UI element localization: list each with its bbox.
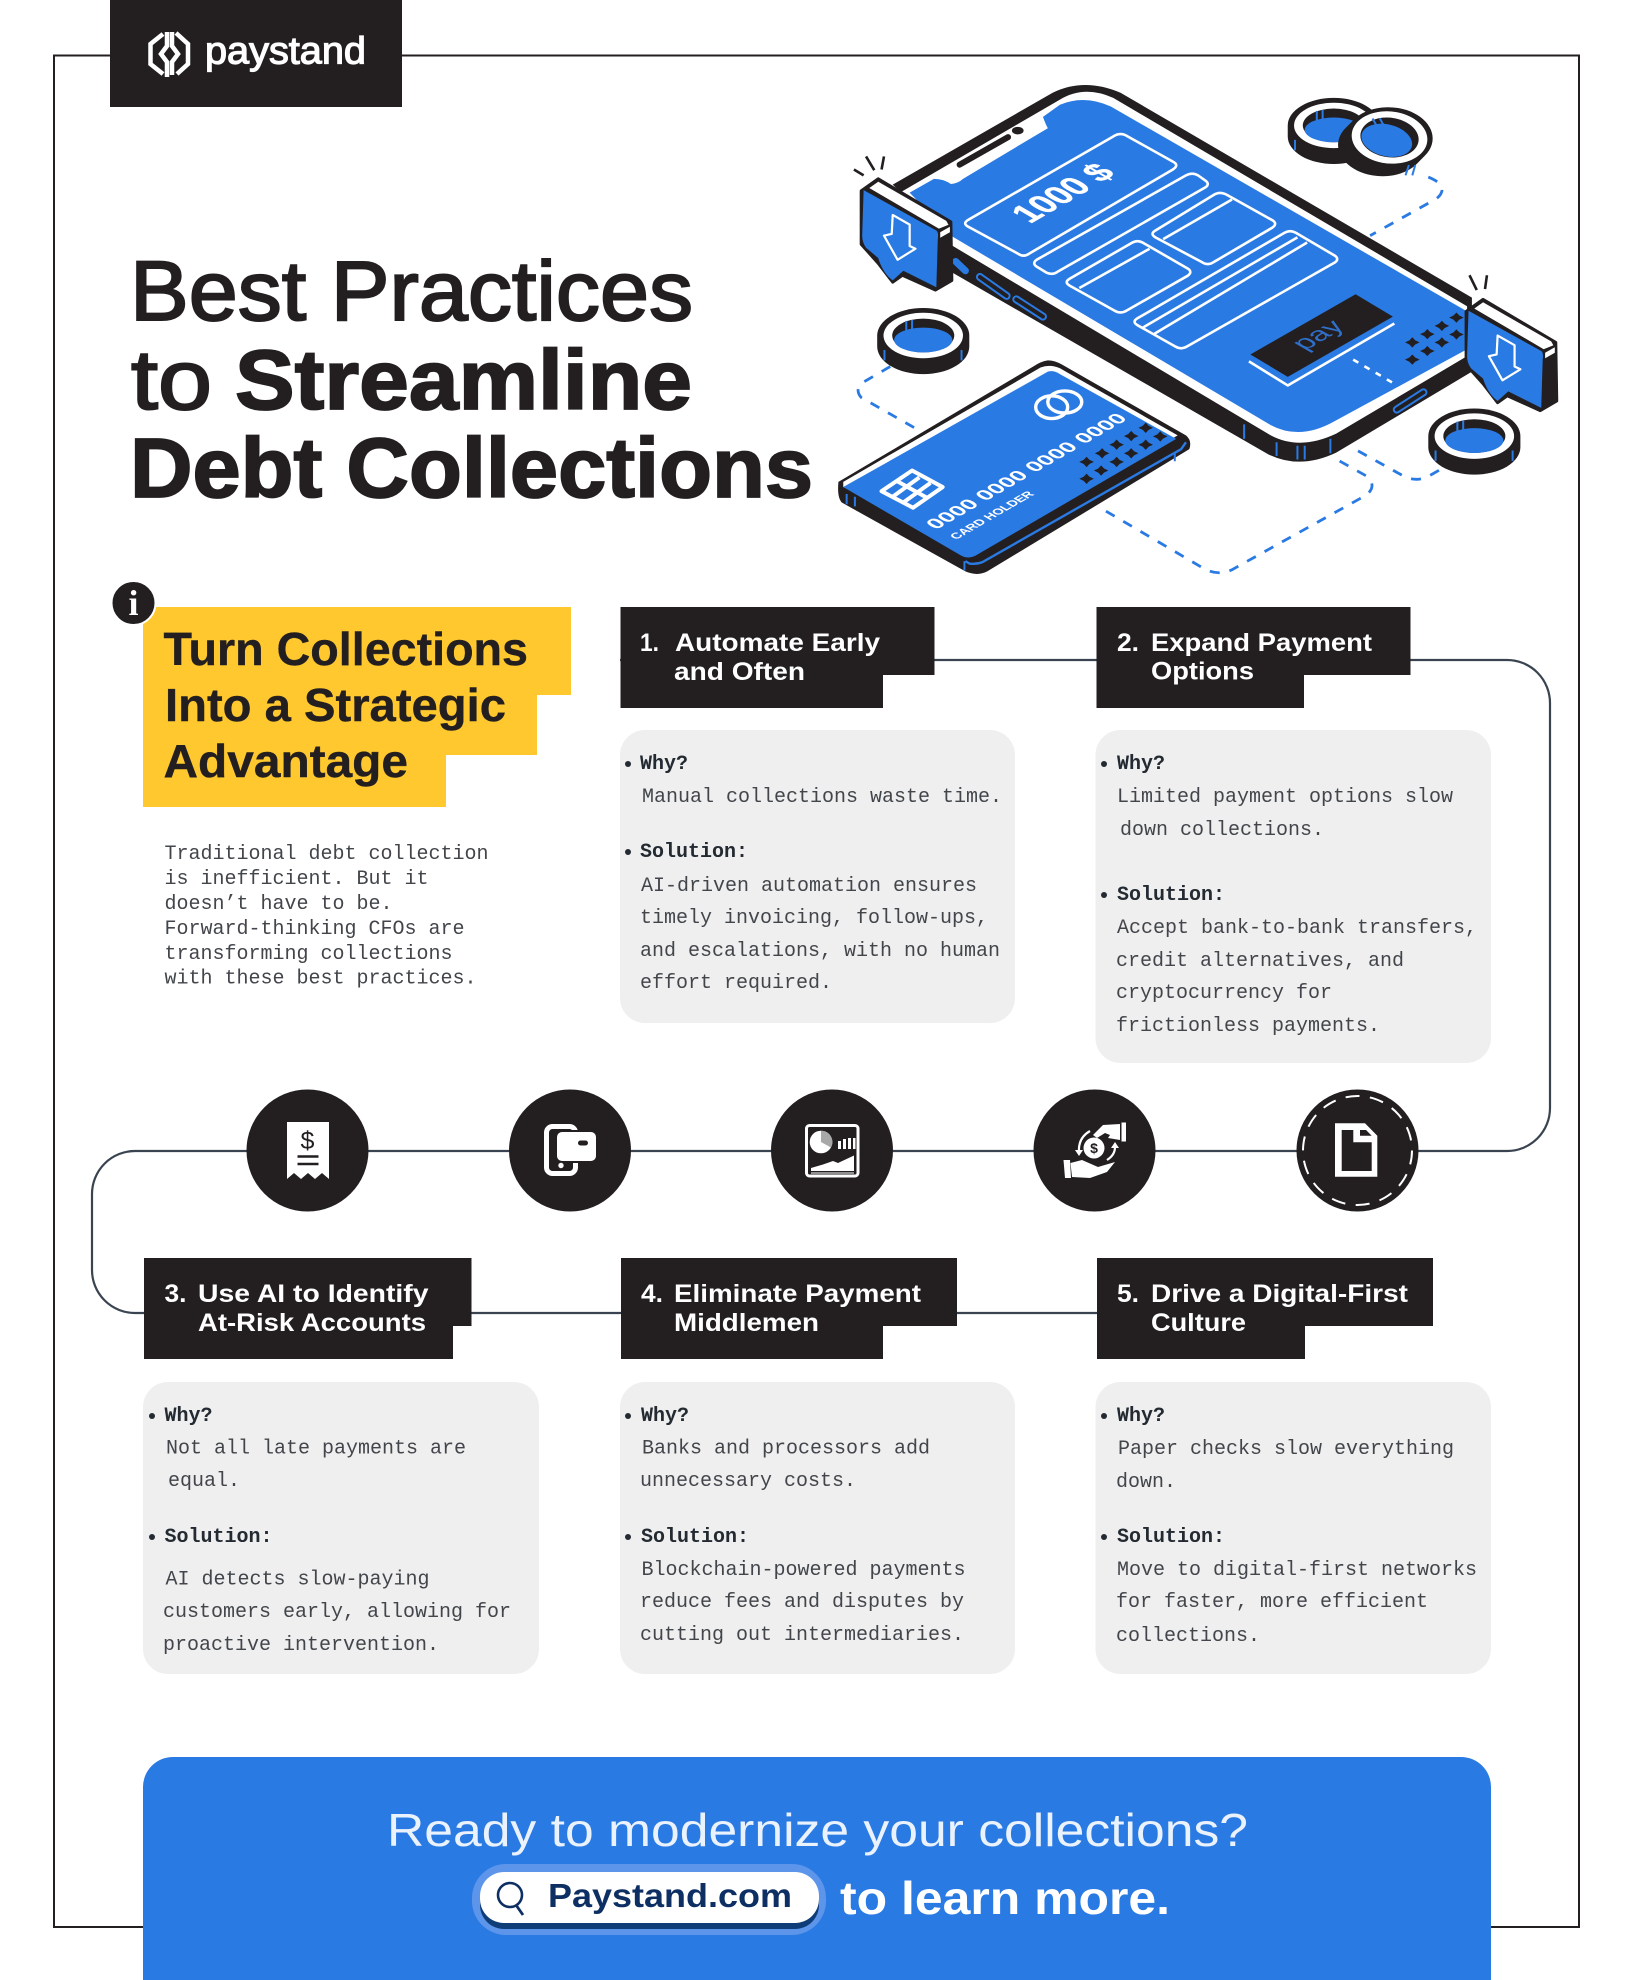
step 2 heading: Options — [1151, 658, 1254, 686]
step 5 heading: 5. — [1117, 1280, 1139, 1308]
step 2 card: cryptocurrency for — [1116, 982, 1332, 1005]
icon: info: i — [128, 583, 139, 623]
step 2 card: down collections. — [1120, 819, 1324, 842]
card holder label: CARD HOLDER — [946, 489, 1038, 542]
step 4 card: unnecessary costs. — [640, 1470, 856, 1493]
intro text: transforming collections — [164, 943, 453, 966]
connector line between steps — [92, 660, 1550, 1313]
credit card — [838, 360, 1190, 574]
icon: digital document — [1296, 1090, 1418, 1212]
title: Streamline — [235, 333, 692, 427]
step 2 card — [1096, 730, 1491, 1063]
call to action panel — [143, 1757, 1491, 1980]
step 3 card: equal. — [168, 1470, 240, 1493]
step 4 heading: Eliminate Payment — [674, 1280, 922, 1308]
step 4 card: Blockchain-powered payments — [642, 1559, 966, 1582]
intro text: Traditional debt collection — [164, 843, 489, 866]
step 2 heading: Expand Payment — [1151, 629, 1373, 657]
intro text: doesn’t have to be. — [164, 893, 393, 916]
step 5 heading: Culture — [1151, 1309, 1246, 1337]
icon: phone wallet — [509, 1090, 631, 1212]
step 3 card: proactive intervention. — [163, 1634, 439, 1657]
intro text — [164, 843, 489, 990]
step 5 card: Solution: — [1117, 1526, 1225, 1549]
card chip — [882, 471, 943, 508]
step 2 heading — [1096, 607, 1410, 708]
intro callout heading: Into a Strategic — [165, 679, 506, 731]
step 5 card: down. — [1116, 1471, 1176, 1494]
step 3 heading: Use AI to Identify — [198, 1280, 429, 1308]
step 1 heading: and Often — [674, 658, 805, 686]
step 1 card: timely invoicing, follow-ups, — [640, 907, 988, 930]
step 4 heading — [621, 1258, 957, 1359]
step 3 heading: 3. — [164, 1280, 186, 1308]
step 2 card: credit alternatives, and — [1116, 950, 1404, 973]
pay label: pay — [1284, 315, 1351, 354]
step 2 card: Limited payment options slow — [1117, 786, 1453, 809]
sparkle dots on phone — [1405, 312, 1464, 365]
icon: chart report — [771, 1090, 893, 1212]
step 5 heading: Drive a Digital-First — [1151, 1280, 1409, 1308]
step 2 heading: 2. — [1117, 629, 1139, 657]
icon: paystand hexagon mark — [150, 32, 188, 77]
step 3 card: Solution: — [164, 1526, 273, 1549]
step 2 card: frictionless payments. — [1116, 1015, 1380, 1038]
step 4 card — [620, 1382, 1015, 1674]
intro callout heading: Advantage — [164, 735, 408, 787]
step 3 heading: At-Risk Accounts — [198, 1309, 426, 1337]
step 4 card: Banks and processors add — [642, 1438, 930, 1460]
step 3 card — [143, 1382, 539, 1674]
step 1 card: Why? — [640, 753, 688, 776]
intro text: with these best practices. — [164, 968, 477, 990]
step 5 card: for faster, more efficient — [1116, 1591, 1428, 1614]
step 1 card: Solution: — [640, 841, 748, 864]
card number: 0000 0000 0000 0000 — [921, 410, 1133, 533]
icon: receipt: $ — [301, 1127, 315, 1155]
call to action ending: to learn more. — [840, 1872, 1170, 1924]
phone body — [893, 85, 1472, 462]
coins — [877, 95, 1520, 475]
intro text: Forward-thinking CFOs are — [164, 918, 465, 941]
step 3 heading — [144, 1258, 472, 1359]
step 5 card: Move to digital-first networks — [1117, 1559, 1477, 1582]
title: Best Practices — [130, 244, 693, 338]
speech badges with arrows — [854, 156, 1557, 411]
step 1 card — [620, 730, 1015, 1023]
step 5 card: Paper checks slow everything — [1118, 1438, 1454, 1461]
title: to — [131, 333, 212, 427]
step 1 card: and escalations, with no human — [640, 940, 1000, 963]
icon: hands exchanging money: $ — [1090, 1140, 1098, 1156]
dashed connector lines — [858, 177, 1443, 573]
step 5 card — [1096, 1382, 1491, 1674]
title: Debt Collections — [130, 421, 813, 515]
call to action question: Ready to modernize your collections? — [387, 1804, 1248, 1856]
step 5 card: Why? — [1117, 1405, 1165, 1428]
step 3 card: AI detects slow-paying — [166, 1568, 430, 1592]
step 4 heading: 4. — [641, 1280, 663, 1308]
step 5 heading — [1097, 1258, 1433, 1359]
step 5 card: collections. — [1116, 1625, 1260, 1648]
step 4 card: Solution: — [641, 1526, 749, 1549]
icon: info — [112, 581, 156, 625]
search pill button — [472, 1864, 826, 1935]
pay button — [1250, 294, 1393, 377]
step 3 card: Not all late payments are — [166, 1438, 466, 1460]
step 2 card: Why? — [1117, 753, 1165, 776]
step 1 heading: 1. — [640, 629, 659, 657]
icon: hands exchanging money — [1034, 1090, 1156, 1212]
icon: receipt — [246, 1090, 368, 1212]
step 1 heading — [620, 607, 934, 708]
step 1 card: effort required. — [640, 972, 832, 995]
phone amount text: 1000 $ — [1001, 157, 1124, 228]
step 4 card: Why? — [641, 1405, 689, 1428]
title — [130, 244, 813, 515]
intro callout heading: Turn Collections — [164, 623, 528, 675]
step 4 card: cutting out intermediaries. — [640, 1624, 964, 1647]
intro text: is inefficient. But it — [164, 868, 429, 891]
intro callout heading — [143, 607, 571, 807]
card logo — [1036, 391, 1082, 419]
logo block — [110, 0, 402, 107]
step 1 card: Manual collections waste time. — [642, 786, 1002, 809]
step 3 card: Why? — [164, 1405, 213, 1428]
search pill button: Paystand.com — [548, 1877, 792, 1914]
illustration: phone, credit card and coins — [838, 85, 1557, 574]
step 1 heading: Automate Early — [675, 629, 880, 657]
step 3 card: customers early, allowing for — [163, 1601, 511, 1624]
step 2 card: Accept bank-to-bank transfers, — [1117, 917, 1477, 940]
screen panels — [965, 134, 1394, 385]
step 4 card: reduce fees and disputes by — [640, 1591, 964, 1614]
logo wordmark: paystand — [205, 30, 366, 72]
step 2 card: Solution: — [1117, 884, 1225, 907]
step 1 card: AI-driven automation ensures — [641, 875, 977, 898]
step 4 heading: Middlemen — [674, 1309, 819, 1337]
